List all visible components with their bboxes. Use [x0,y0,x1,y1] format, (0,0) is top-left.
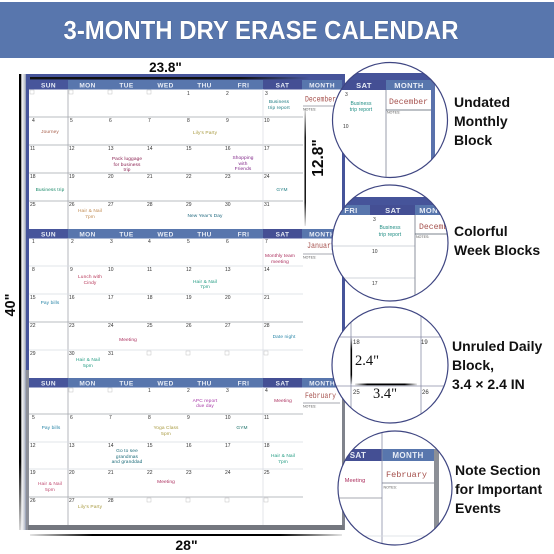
label: unruled daily block: 3.4 × 2.4 IN [452,376,525,392]
label: 3.4 inch width: 3.4" [373,386,397,402]
weekday header row: MON [79,231,96,238]
date numbers: 10 [225,415,231,421]
callout circle: colorful week blocks: FRI [344,206,358,215]
date numbers: 2 [226,91,229,97]
callout circle: undated monthly block: trip report [350,107,373,113]
label: note section: for Important [455,481,542,497]
callout circle: unruled daily block: 26 [422,390,429,396]
date numbers: 8 [148,415,151,421]
events: Meeting [274,398,292,404]
date numbers: 30 [225,202,231,208]
callout circle: colorful week blocks [330,185,458,301]
date numbers: 27 [108,202,114,208]
date numbers: 20 [108,174,114,180]
weekday header row: THU [197,82,212,89]
date numbers: 17 [225,443,231,449]
events: 7pm [278,459,288,465]
date numbers: 4 [32,118,35,124]
date numbers: 15 [147,443,153,449]
callout circle: undated monthly block: Business [350,101,372,107]
events: Meeting [119,337,137,343]
date numbers: 14 [264,267,270,273]
date numbers: 13 [108,146,114,152]
events: Go to see [116,448,138,454]
events: for business [113,162,141,168]
label: colorful week blocks: Week Blocks [454,242,540,258]
date numbers: 8 [187,118,190,124]
weekday header row: FRI [238,82,249,89]
date numbers: 3 [110,239,113,245]
date numbers: 20 [69,470,75,476]
date numbers: 1 [187,91,190,97]
date numbers [30,90,270,208]
title banner [0,2,554,58]
date numbers: 23 [225,174,231,180]
weekday header row: SAT [276,82,289,89]
date numbers [30,388,270,504]
events: Hair & Nail [271,453,295,459]
date numbers: 18 [264,443,270,449]
events: Pack luggage [112,156,142,162]
date numbers: 4 [265,388,268,394]
events: 5pm [45,487,55,493]
date numbers: 1 [32,239,35,245]
label: unruled daily block [452,338,542,392]
date numbers: 23 [186,470,192,476]
weekday header row: TUE [119,380,134,387]
events: Pay bills [41,300,60,306]
events [38,398,295,510]
month name and notes: December: December [305,96,336,104]
month name and notes: February [303,392,340,408]
date numbers: 17 [108,295,114,301]
weekday header row: WED [157,231,174,238]
weekday header row: WED [157,380,174,387]
date numbers: 31 [264,202,270,208]
date numbers: 7 [148,118,151,124]
events: Friends [235,166,252,172]
callout circle: undated monthly block: SAT [356,81,372,90]
events: GYM [236,425,248,431]
events: Business trip [36,187,65,193]
date numbers: 15 [30,295,36,301]
date numbers: 14 [147,146,153,152]
date numbers: 12 [186,267,192,273]
callout circle: note section: NOTES: [384,486,397,490]
date numbers: 24 [108,323,114,329]
callout circle: colorful week blocks: 10 [372,249,378,255]
month name and notes: January: NOTES: [303,256,316,260]
callout circle: note section: February [386,470,427,480]
events: Yoga Class [153,425,179,431]
events: 5pm [83,363,93,369]
callout circle: colorful week blocks: 3 [373,217,376,223]
date numbers: 26 [30,498,36,504]
events: Hair & Nail [38,481,62,487]
callout circle: colorful week blocks: NOTES: [416,235,429,239]
label: note section: Note Section [455,462,541,478]
label: unruled daily block: Block, [452,357,494,373]
dimension: height 40 in: 40" [3,293,19,317]
label: note section [455,462,542,516]
events: New Year's Day [187,213,223,219]
date numbers: 3 [226,388,229,394]
events: trip report [268,105,290,111]
events: Hair & Nail [78,208,102,214]
date numbers: 5 [187,239,190,245]
date numbers: 16 [69,295,75,301]
events: due day [196,403,214,409]
date numbers: 27 [69,498,75,504]
weekday header row: SAT [276,380,289,387]
date numbers: 21 [147,174,153,180]
weekday header row: TUE [119,231,134,238]
events: Lily's Party [193,130,218,136]
date numbers: 17 [264,146,270,152]
callout circle: undated monthly block: MONTH [394,81,424,90]
callout circle: undated monthly block: NOTES: [387,110,400,114]
weekday header row: MONTH [309,380,335,387]
month name and notes: December [303,96,340,226]
weekday header row [29,229,342,238]
events: Monthly team [265,253,295,259]
date numbers: 15 [186,146,192,152]
label: colorful week blocks [454,223,540,258]
events: Lily's Party [78,504,103,510]
date numbers: 11 [264,415,269,421]
date numbers: 14 [108,443,114,449]
weekday header row: SUN [41,231,56,238]
date numbers: 22 [30,323,36,329]
date numbers: 28 [108,498,114,504]
date numbers: 31 [108,351,114,357]
weekday header row: MON [79,82,96,89]
dimension: width 28 in: 28" [175,537,198,553]
date numbers: 4 [148,239,151,245]
date numbers: 13 [69,443,75,449]
date numbers: 19 [186,295,192,301]
month block: December [29,80,342,229]
weekday header row: THU [197,380,212,387]
events: APC report [193,398,218,404]
date numbers: 8 [32,267,35,273]
date numbers: 2 [71,239,74,245]
weekday header row: MONTH [309,231,335,238]
callout circle: unruled daily block [330,305,450,425]
date numbers: 28 [147,202,153,208]
date numbers: 24 [264,174,270,180]
date numbers: 1 [148,388,151,394]
month name and notes: December: NOTES: [303,108,316,112]
events: Hair & Nail [193,279,217,285]
date numbers: 19 [30,470,36,476]
dimension: width 23.8 in: 23.8" [149,60,182,75]
date numbers: 7 [109,415,112,421]
callout circle: undated monthly block: December [389,97,428,107]
date numbers: 24 [225,470,231,476]
events: 5pm [161,431,171,437]
weekday header row: SAT [276,231,289,238]
date numbers: 16 [225,146,231,152]
date numbers: 6 [70,415,73,421]
date numbers: 22 [147,470,153,476]
date numbers: 6 [109,118,112,124]
date numbers: 2 [187,388,190,394]
events: and granddad [112,459,143,465]
date numbers: 28 [264,323,270,329]
date numbers: 19 [69,174,75,180]
date numbers: 5 [70,118,73,124]
events: Business [269,99,290,105]
events: GYM [276,187,288,193]
weekday header row: WED [157,82,174,89]
label: undated monthly block: Monthly [454,113,508,129]
events: trip [123,167,131,173]
label: undated monthly block [454,94,510,148]
weekday header row [29,80,342,90]
events: 7pm [200,284,210,290]
date numbers: 12 [30,443,36,449]
events: Cindy [84,280,97,286]
month name and notes: February: NOTES: [303,404,316,408]
date numbers: 11 [147,267,152,273]
date numbers: 20 [225,295,231,301]
date numbers: 29 [30,351,36,357]
date numbers: 5 [32,415,35,421]
month name and notes: January: January [307,242,335,251]
events: with [239,161,248,167]
label: colorful week blocks: Colorful [454,223,508,239]
callout circle: colorful week blocks: MONTH [419,206,449,215]
weekday header row: THU [197,231,212,238]
date numbers: 29 [186,202,192,208]
callout circle: colorful week blocks: SAT [385,206,401,215]
callout circle: unruled daily block: 25 [353,390,360,396]
weekday header row: TUE [119,82,134,89]
events: Lunch with [78,274,102,280]
weekday header row: MON [79,380,96,387]
label: 2.4 inch height: 2.4" [355,353,379,369]
weekday header row: FRI [238,231,249,238]
date numbers: 26 [186,323,192,329]
date numbers: 3 [265,91,268,97]
callout circle: colorful week blocks: trip report [379,232,402,238]
label: undated monthly block: Undated [454,94,510,110]
month block: February [29,378,342,525]
date numbers: 21 [108,470,114,476]
title: 3-MONTH DRY ERASE CALENDAR [64,15,459,45]
date numbers [30,239,270,357]
events: Hair & Nail [76,357,100,363]
dimension: height 12.8 in: 12.8" [310,139,327,177]
date numbers: 18 [147,295,153,301]
date numbers: 16 [186,443,192,449]
month name and notes: January [303,242,340,260]
date numbers: 10 [108,267,114,273]
events: Pay bills [42,425,61,431]
weekday header row: SUN [41,82,56,89]
events: Meeting [157,479,175,485]
month block: January [29,229,342,378]
callout circle: note section [335,430,452,546]
events: 7pm [85,214,95,220]
date numbers: 25 [147,323,153,329]
label: unruled daily block: Unruled Daily [452,338,542,354]
callout circle: colorful week blocks: Business [379,225,401,231]
date numbers: 18 [30,174,36,180]
weekday header row: SUN [41,380,56,387]
date numbers: 9 [226,118,229,124]
date numbers: 27 [225,323,231,329]
date numbers: 9 [187,415,190,421]
events: Shopping [232,155,254,161]
events: Date night [273,334,296,340]
callout circle: unruled daily block: 18 [353,340,360,346]
callout circle: colorful week blocks: December [419,222,458,232]
label: undated monthly block: Block [454,132,492,148]
events: grandmas [116,454,139,460]
date numbers: 7 [265,239,268,245]
callout circle: note section: SAT [350,451,366,460]
wall calendar [19,74,345,536]
date numbers: 10 [264,118,270,124]
callout circle: undated monthly block: 10 [343,124,349,130]
callout circle: undated monthly block: 3 [345,92,348,98]
date numbers: 9 [70,267,73,273]
weekday header row: FRI [238,380,249,387]
date numbers: 25 [30,202,36,208]
date numbers: 30 [69,351,75,357]
callout circle: note section: Meeting [345,478,365,484]
date numbers: 13 [225,267,231,273]
weekday header row: MONTH [309,82,335,89]
date numbers: 6 [226,239,229,245]
events [41,253,296,369]
date numbers: 23 [69,323,75,329]
date numbers: 26 [69,202,75,208]
date numbers: 11 [30,146,35,152]
label: note section: Events [455,500,501,516]
date numbers: 22 [186,174,192,180]
callout circle: undated monthly block [330,62,448,180]
events: Journey [41,129,59,135]
events: meeting [271,259,289,265]
date numbers: 12 [69,146,75,152]
month name and notes: February: February [305,392,336,401]
weekday header row [29,378,342,388]
events [36,99,290,220]
callout circle: note section: MONTH [392,451,424,460]
date numbers: 21 [264,295,270,301]
callout circle: colorful week blocks: 17 [372,281,378,287]
callout circle: unruled daily block: 19 [421,340,428,346]
date numbers: 25 [264,470,270,476]
